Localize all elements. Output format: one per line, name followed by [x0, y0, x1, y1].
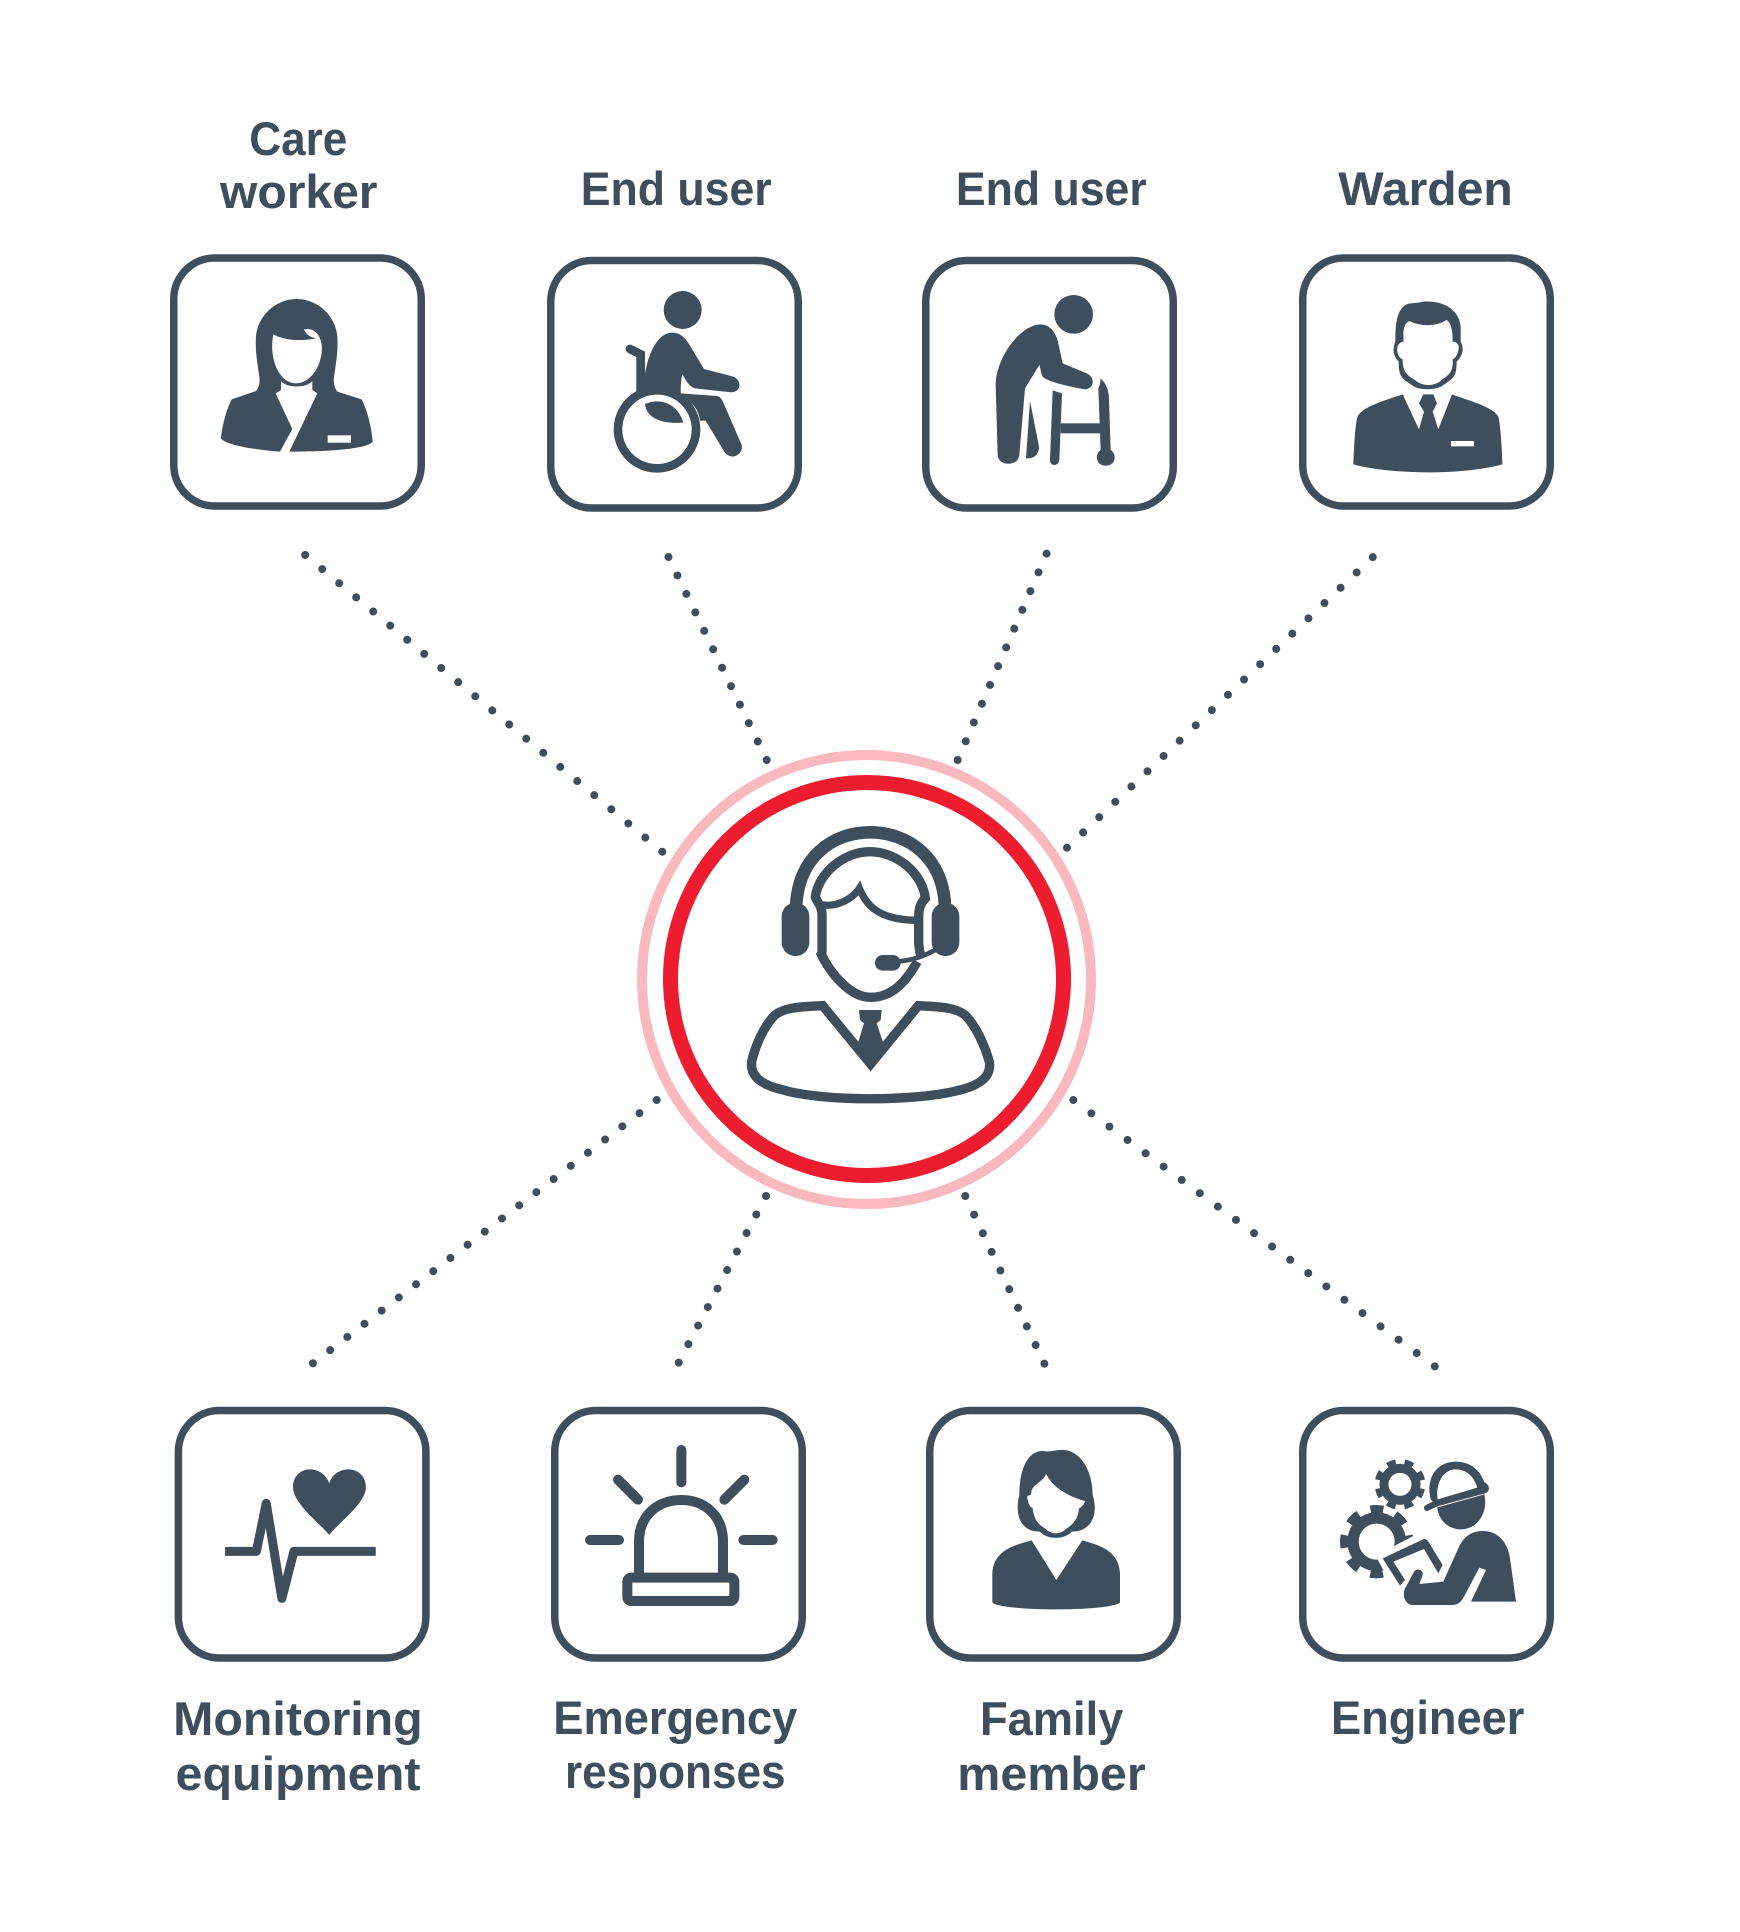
icon: family member: [992, 1450, 1120, 1609]
label: monitoring equipment: [173, 1692, 423, 1800]
icon box: wheelchair: [551, 260, 798, 508]
icon: wheelchair user: [618, 291, 742, 468]
label: family member: Family: [980, 1692, 1123, 1745]
label: emergency responses: Emergency: [553, 1691, 797, 1744]
panel: emergency responses: [553, 1410, 802, 1798]
panel: end user walker: [926, 162, 1173, 508]
icon: alarm beacon: [590, 1450, 773, 1601]
panel: monitoring equipment: [173, 1410, 426, 1800]
icon: engineer with gears: [1338, 1458, 1516, 1605]
inner red ring: [670, 782, 1064, 1176]
label: family member: [957, 1692, 1146, 1800]
label: care worker: [219, 112, 378, 218]
panel: warden: [1303, 162, 1550, 506]
icon box: engineer: [1303, 1410, 1550, 1658]
label: monitoring equipment: Monitoring: [173, 1692, 423, 1745]
label: emergency responses: [553, 1691, 797, 1798]
label: care worker: worker: [219, 165, 378, 218]
label: emergency responses: responses: [565, 1745, 786, 1798]
outer pink ring: [642, 755, 1091, 1204]
label: end user: End user: [581, 162, 772, 215]
icon box: warden: [1303, 258, 1550, 506]
icon box: monitoring: [178, 1410, 426, 1658]
label: care worker: Care: [249, 112, 347, 165]
panel: central operator: [642, 755, 1091, 1204]
icon box: care worker: [174, 258, 421, 506]
label: engineer: Engineer: [1331, 1691, 1524, 1744]
icon: care worker: [221, 299, 373, 452]
icon: person with walking frame: [996, 295, 1115, 466]
icon box: emergency: [555, 1410, 802, 1658]
icon: warden: [1353, 301, 1502, 472]
label: end user: End user: [956, 162, 1147, 215]
panel: engineer: [1303, 1410, 1550, 1744]
icon: operator with headset: [752, 832, 990, 1099]
label: monitoring equipment: equipment: [176, 1747, 421, 1800]
label: warden: Warden: [1338, 162, 1513, 215]
panel: care worker: [174, 112, 421, 506]
icon box: walker: [926, 260, 1173, 508]
icon box: family member: [930, 1410, 1177, 1658]
label: family member: member: [957, 1747, 1146, 1800]
panel: family member: [930, 1410, 1177, 1800]
icon: heart and pulse: [225, 1469, 376, 1598]
dotted connectors: [304, 553, 1437, 1368]
panel: end user wheelchair: [551, 162, 798, 508]
